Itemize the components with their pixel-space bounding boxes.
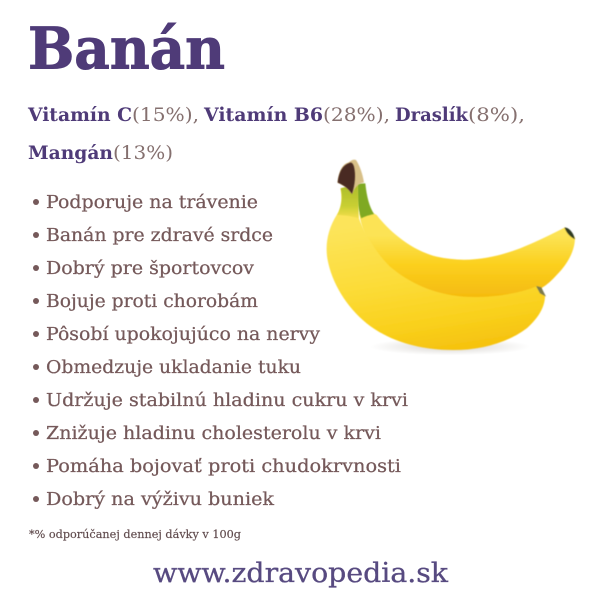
front banana tip	[536, 286, 546, 297]
green stem	[357, 183, 374, 218]
benefit 4: Bojuje proti chorobám	[46, 292, 258, 312]
benefit 1: Podporuje na trávenie	[46, 193, 258, 213]
back banana	[359, 212, 575, 307]
website url: www.zdravopedia.sk	[153, 558, 449, 589]
nutrient: potassium: Draslík	[395, 104, 469, 126]
nutrients text block	[27, 104, 525, 164]
benefit 10: Dobrý na výživu buniek	[46, 490, 274, 510]
benefit 8: Znižuje hladinu cholesterolu v krvi	[46, 424, 381, 444]
icon: bananas illustration	[327, 160, 575, 355]
benefit 2: Banán pre zdravé srdce	[46, 226, 273, 246]
footnote: *% odporúčanej dennej dávky v 100g	[29, 528, 241, 541]
nutrient: vitamin C	[27, 104, 199, 126]
benefit 7: Udržuje stabilnú hladinu cukru v krvi	[46, 391, 408, 411]
front banana	[327, 187, 546, 350]
nutrient: manganese: (13%)	[113, 142, 173, 164]
title: Banán	[28, 16, 225, 82]
yellow-green stem neck	[337, 183, 359, 218]
banana shadow	[370, 338, 530, 355]
nutrient: manganese: Mangán	[28, 142, 113, 164]
benefit 3: Dobrý pre športovcov	[46, 259, 254, 279]
benefit 6: Obmedzuje ukladanie tuku	[46, 358, 301, 378]
benefits list	[33, 193, 408, 510]
nutrient: vitamin C: (15%),	[132, 104, 199, 126]
nutrient: vitamin B6	[203, 104, 390, 126]
nutrient: potassium	[395, 104, 525, 126]
nutrient: vitamin C: Vitamín C	[27, 104, 132, 126]
nutrient: vitamin B6: (28%),	[323, 104, 390, 126]
nutrient: potassium: (8%),	[468, 104, 525, 126]
back banana tip	[564, 227, 575, 239]
dark stem cut	[338, 163, 355, 194]
brown stem cut	[338, 160, 364, 194]
benefit 5: Pôsobí upokojujúco na nervy	[46, 325, 320, 345]
benefit 9: Pomáha bojovať proti chudokrvnosti	[46, 457, 401, 477]
nutrient: manganese	[28, 142, 173, 164]
nutrient: vitamin B6: Vitamín B6	[203, 104, 323, 126]
